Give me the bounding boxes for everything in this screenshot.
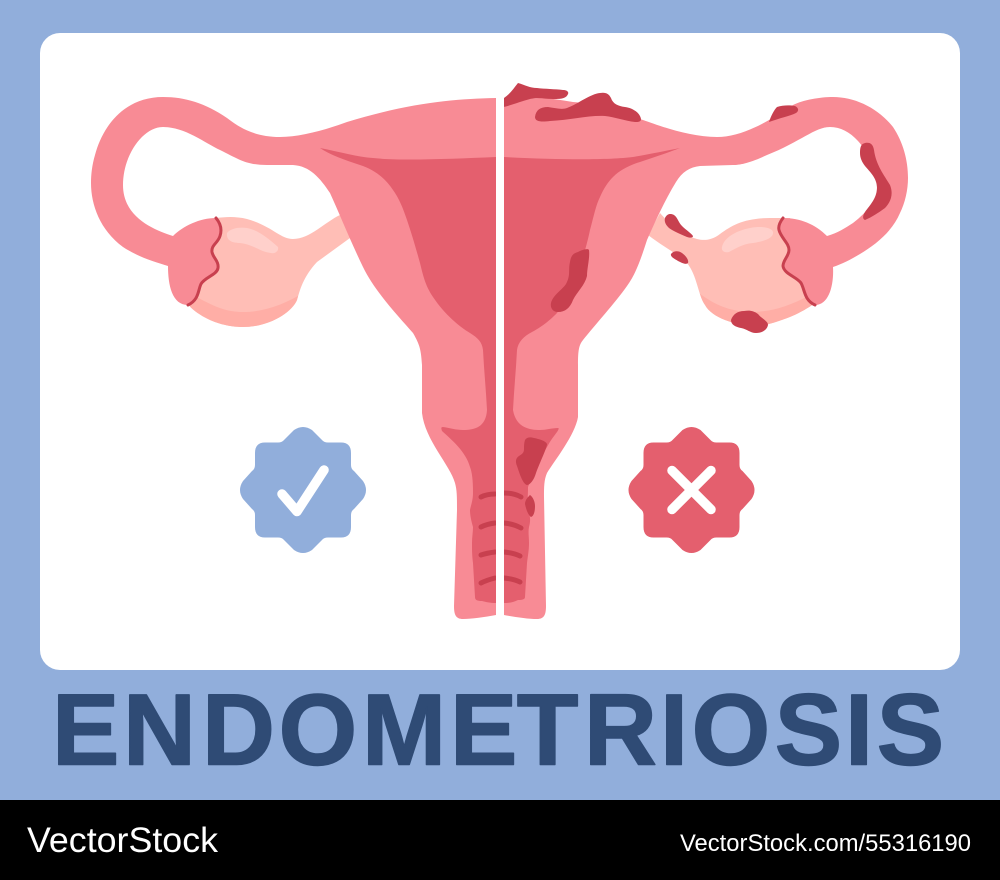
right half of uterus with fallopian tube	[504, 97, 908, 619]
footer brand: VectorStock	[27, 821, 219, 860]
icon: healthy check badge	[240, 427, 366, 553]
right ovary boundary line	[779, 218, 815, 305]
footer bar	[0, 800, 1000, 880]
footer image id: VectorStock.com/55316190	[680, 830, 971, 857]
center divider line	[496, 97, 504, 620]
icon: affected cross badge	[628, 427, 754, 553]
left half of uterus with fallopian tube	[91, 97, 496, 619]
right ovary (affected)	[649, 213, 812, 324]
left ovary (healthy)	[190, 215, 350, 327]
endometriosis lesions	[504, 83, 892, 517]
vaginal rugae folds	[481, 493, 521, 583]
uterus diagram	[91, 83, 908, 620]
panel: white illustration card	[40, 33, 960, 670]
left uterine cavity	[320, 148, 496, 603]
left ovary boundary line	[188, 218, 221, 305]
title: ENDOMETRIOSIS	[52, 674, 944, 786]
right uterine cavity	[504, 148, 680, 603]
